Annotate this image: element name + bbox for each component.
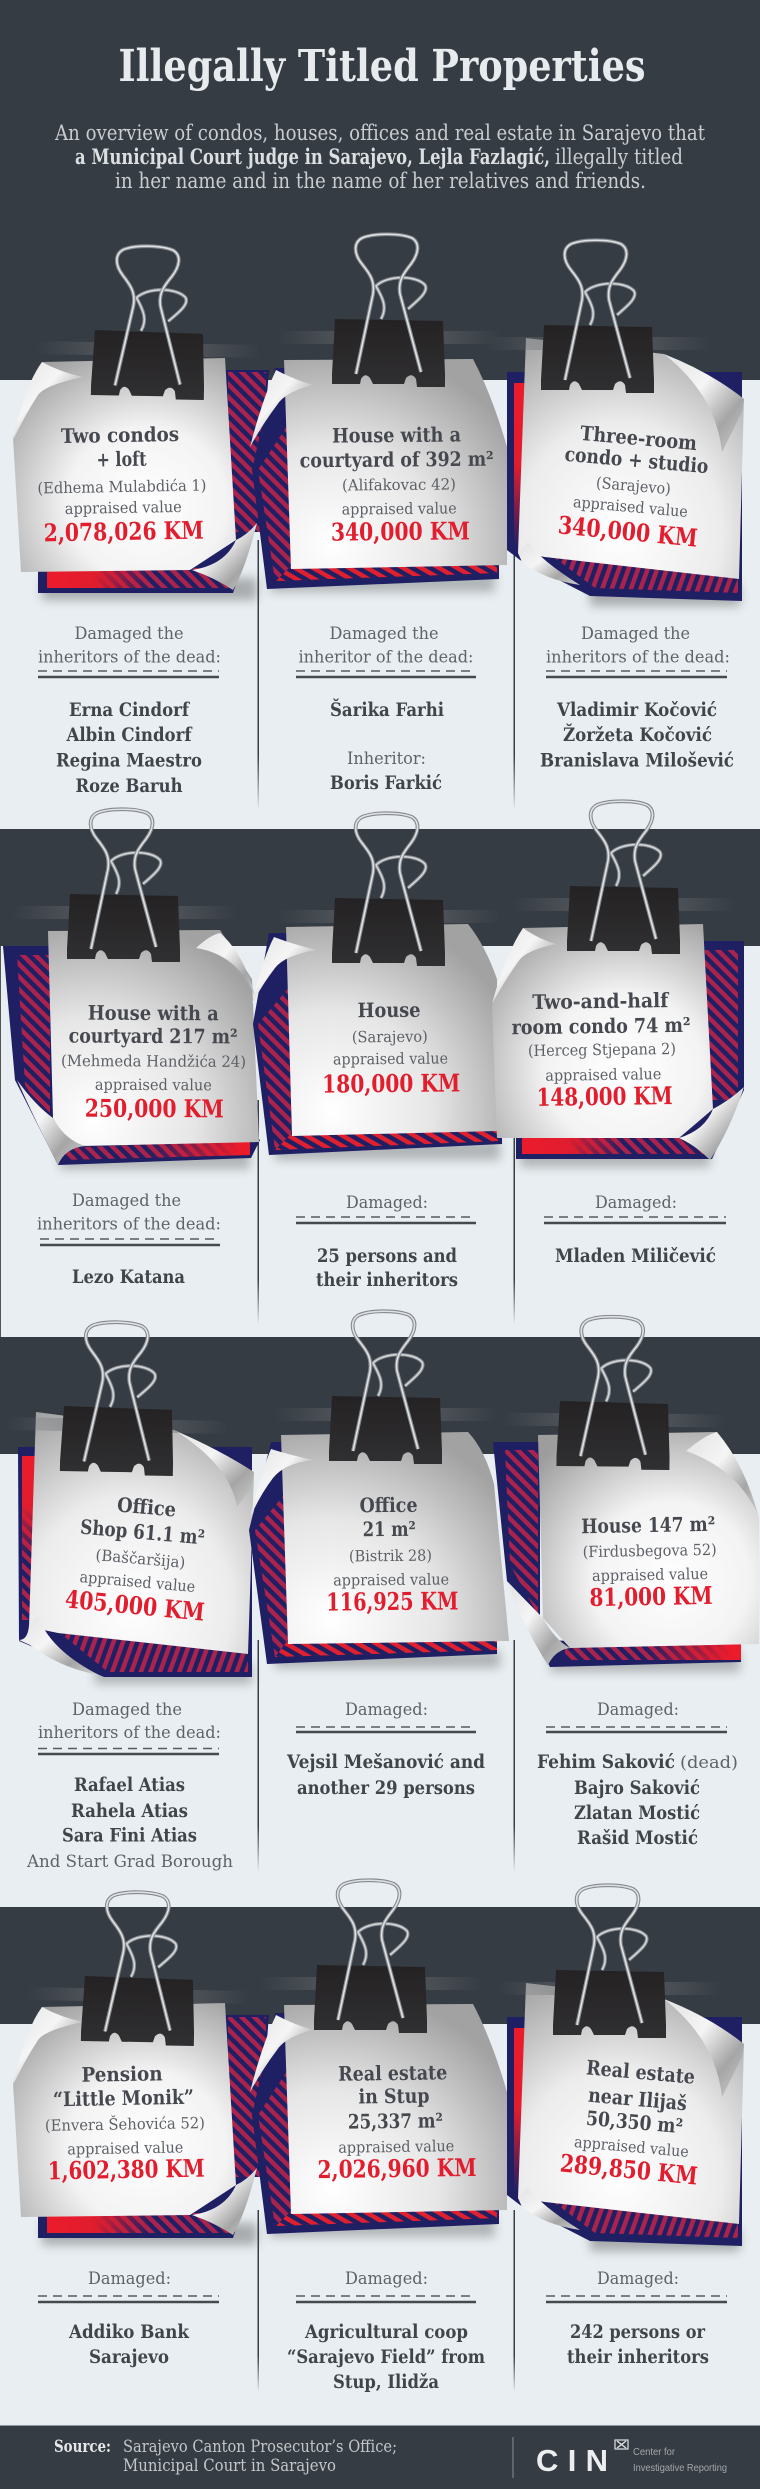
- card text: [325, 1492, 458, 1617]
- damaged column 2 row 2: [296, 1193, 476, 1291]
- binder clip: [277, 234, 501, 387]
- damaged column 1 row 3: [26, 1700, 233, 1872]
- card text: [299, 422, 494, 547]
- card: two-and-half room condo: [492, 801, 744, 1167]
- damaged column 1 row 3: Rahela Atias: [71, 1800, 188, 1822]
- damaged column 2 row 2: their inheritors: [316, 1269, 458, 1291]
- damaged column 3 row 1: Branislava Milošević: [540, 750, 734, 772]
- damaged column 2 row 1: Boris Farkić: [330, 772, 442, 794]
- damaged column 3 row 1: Žoržeta Kočović: [563, 723, 712, 746]
- damaged column 2 row 4: [287, 2269, 485, 2393]
- damaged column 1 row 2: inheritors of the dead:: [37, 1214, 221, 1234]
- damaged column 3 row 4: their inheritors: [567, 2346, 709, 2368]
- card text: appraised value: [545, 1065, 661, 1085]
- card text: 1,602,380 KM: [47, 2154, 205, 2185]
- card text: Three-room: [579, 421, 698, 455]
- damaged column 3 row 3: Bajro Saković: [574, 1777, 700, 1799]
- card text: (Edhema Mulabdića 1): [37, 477, 207, 497]
- row 3 band: [0, 1337, 760, 1454]
- card text: 2,026,960 KM: [317, 2153, 477, 2184]
- damaged column 3 row 1: Vladimir Kočović: [556, 699, 717, 721]
- damaged column 1 row 3: Damaged the: [72, 1700, 182, 1720]
- card text: [316, 2060, 477, 2184]
- damaged column 1 row 2: [37, 1191, 221, 1288]
- damaged column 1 row 1: Erna Cindorf: [69, 699, 191, 721]
- damaged column 2 row 4: Damaged:: [345, 2269, 428, 2289]
- damaged column 2 row 1: [296, 624, 476, 794]
- damaged column 1 row 4: Addiko Bank: [68, 2321, 190, 2343]
- card text: appraised value: [333, 1049, 448, 1068]
- card text: 50,350 m²: [585, 2106, 684, 2138]
- intro text: in her name and in the name of her relatives and friends.: [115, 169, 646, 193]
- damaged column 3 row 3: Rašid Mostić: [577, 1827, 698, 1849]
- card text: appraised value: [95, 1076, 212, 1094]
- damaged column 3 row 1: Damaged the: [581, 624, 690, 644]
- damaged column 2 row 4: Stup, Ilidža: [333, 2371, 439, 2393]
- damaged column 1 row 1: Damaged the: [74, 624, 184, 644]
- damaged column 2 row 2: Damaged:: [346, 1193, 428, 1213]
- card text: appraised value: [573, 2133, 690, 2161]
- card: house firdusbegova: [493, 1316, 759, 1672]
- card text: 2,078,026 KM: [43, 516, 204, 547]
- damaged column 3 row 1: [540, 624, 734, 772]
- card text: 289,850 KM: [559, 2148, 699, 2191]
- card text: (Baščaršija): [95, 1546, 186, 1572]
- damaged column 1 row 3: Sara Fini Atias: [62, 1824, 197, 1846]
- card text: (Bistrik 28): [349, 1547, 432, 1565]
- intro text: [54, 121, 705, 193]
- damaged column 1 row 1: Roze Baruh: [76, 775, 183, 797]
- damaged column 3 row 3: Damaged:: [597, 1700, 679, 1720]
- intro text: a Municipal Court judge in Sarajevo, Lejla Fazlagić,: [75, 144, 550, 169]
- card text: (Herceg Stjepana 2): [528, 1040, 676, 1060]
- card text: Two-and-half: [532, 988, 670, 1014]
- damaged column 2 row 1: Damaged the: [330, 624, 438, 644]
- card text: appraised value: [65, 498, 182, 518]
- card: real estate near ilijas: [498, 1885, 744, 2251]
- card: three-room condo: [486, 240, 744, 606]
- damaged column 2 row 3: [286, 1700, 485, 1799]
- damaged column 3 row 3: Zlatan Mostić: [574, 1802, 700, 1824]
- intro text: illegally titled: [555, 145, 683, 169]
- card text: 25,337 m²: [348, 2108, 443, 2134]
- damaged column 1 row 1: inheritors of the dead:: [38, 648, 221, 668]
- damaged column 1 row 2: Damaged the: [72, 1191, 181, 1211]
- card text: 180,000 KM: [322, 1068, 460, 1099]
- binder clip: [501, 1316, 727, 1470]
- damaged column 1 row 4: Sarajevo: [89, 2346, 169, 2368]
- card text: room condo 74 m²: [511, 1013, 691, 1039]
- title: Illegally Titled Properties: [118, 41, 646, 92]
- binder clip: [259, 1880, 483, 2033]
- damaged column 2 row 3: Damaged:: [345, 1700, 428, 1720]
- card text: near Ilijaš: [587, 2083, 688, 2115]
- damaged column 1 row 3: inheritors of the dead:: [38, 1723, 221, 1743]
- card text: 405,000 KM: [64, 1584, 206, 1627]
- card text: appraised value: [333, 1570, 449, 1590]
- damaged column 2 row 4: Agricultural coop: [304, 2321, 468, 2343]
- damaged column 1 row 1: Albin Cindorf: [66, 724, 193, 746]
- card: office bistrik: [249, 1311, 509, 1668]
- card text: appraised value: [67, 2138, 183, 2159]
- damaged column 3 row 2: [544, 1193, 726, 1267]
- card text: [559, 2055, 699, 2191]
- binder clip: [498, 1885, 722, 2038]
- card: house sarajevo: [252, 813, 502, 1160]
- card text: Real estate: [338, 2060, 447, 2086]
- card text: 250,000 KM: [85, 1094, 224, 1123]
- card: pension little monik: [13, 1890, 269, 2245]
- card text: 21 m²: [363, 1517, 416, 1541]
- card text: 340,000 KM: [331, 516, 470, 547]
- card: house with courtyard 392: [250, 234, 507, 592]
- damaged column 1 row 1: [38, 624, 221, 797]
- damaged column 3 row 1: inheritors of the dead:: [546, 648, 730, 668]
- damaged column 3 row 3: (dead): [680, 1753, 738, 1773]
- damaged column 1 row 4: [38, 2269, 219, 2368]
- damaged column 3 row 4: [546, 2269, 727, 2368]
- damaged column 1 row 2: Lezo Katana: [72, 1266, 185, 1288]
- card text: House 147 m²: [581, 1512, 715, 1538]
- card text: 340,000 KM: [557, 510, 699, 553]
- card text: appraised value: [338, 2137, 454, 2157]
- card text: [44, 2061, 206, 2185]
- card: house with courtyard 217: [3, 809, 260, 1169]
- card text: in Stup: [358, 2084, 430, 2109]
- card text: House with a: [88, 1001, 219, 1025]
- card text: Real estate: [585, 2055, 696, 2089]
- damaged column 2 row 1: Šarika Farhi: [330, 698, 444, 721]
- card text: condo + studio: [564, 442, 709, 478]
- binder clip: [12, 809, 236, 962]
- card text: (Sarajevo): [352, 1028, 428, 1046]
- card text: (Alifakovac 42): [342, 475, 456, 494]
- card text: [581, 1512, 718, 1612]
- card text: appraised value: [592, 1565, 708, 1585]
- card text: courtyard 217 m²: [69, 1024, 238, 1048]
- binder clip: [274, 1311, 498, 1464]
- damaged column 1 row 3: Rafael Atias: [74, 1774, 185, 1796]
- damaged column 1 row 4: Damaged:: [88, 2269, 171, 2289]
- source text: Source:: [54, 2437, 111, 2457]
- header band: [0, 0, 760, 380]
- binder clip: [277, 813, 501, 966]
- row 2 band: [0, 829, 760, 946]
- card text: Two condos: [61, 422, 179, 448]
- card text: [511, 988, 692, 1112]
- card: office shop: [5, 1320, 254, 1684]
- card text: (Envera Šehovića 52): [45, 2114, 205, 2135]
- damaged column 3 row 4: Damaged:: [597, 2269, 679, 2289]
- damaged column 2 row 1: Inheritor:: [347, 749, 426, 769]
- damaged column 3 row 3: [537, 1700, 738, 1849]
- binder clip: [5, 1320, 231, 1477]
- damaged column 1 row 1: Regina Maestro: [56, 750, 202, 772]
- card text: (Mehmeda Handžića 24): [61, 1052, 246, 1071]
- binder clip: [512, 801, 736, 954]
- source text: Municipal Court in Sarajevo: [123, 2456, 336, 2476]
- CIN logo: [536, 2440, 727, 2478]
- card text: House with a: [332, 422, 461, 448]
- card text: appraised value: [572, 493, 689, 521]
- damaged column 2 row 2: 25 persons and: [317, 1245, 457, 1267]
- damaged column 3 row 2: Damaged:: [595, 1193, 677, 1213]
- card text: [61, 1001, 246, 1123]
- card text: Office: [359, 1493, 418, 1517]
- card text: [64, 1493, 206, 1627]
- binder clip: [36, 244, 262, 401]
- card text: 81,000 KM: [589, 1581, 713, 1612]
- card text: Pension: [81, 2061, 163, 2087]
- source text: Sarajevo Canton Prosecutor’s Office;: [123, 2437, 397, 2457]
- card: real estate in stup: [250, 1880, 507, 2237]
- damaged column 2 row 3: another 29 persons: [297, 1777, 475, 1799]
- card text: appraised value: [79, 1568, 196, 1596]
- card text: [36, 422, 207, 547]
- CIN logo: Center for: [633, 2446, 675, 2458]
- binder clip: [26, 1890, 252, 2047]
- card text: House: [357, 998, 421, 1022]
- card text: “Little Monik”: [53, 2085, 194, 2111]
- card text: (Firdusbegova 52): [583, 1541, 717, 1561]
- card text: [557, 421, 709, 553]
- card text: 148,000 KM: [536, 1081, 673, 1112]
- card text: + loft: [96, 447, 147, 471]
- damaged column 2 row 4: “Sarajevo Field” from: [287, 2346, 485, 2368]
- damaged column 3 row 2: Mladen Miličević: [555, 1245, 716, 1267]
- row 4 band: [0, 1907, 760, 2024]
- damaged column 2 row 3: Vejsil Mešanović and: [286, 1751, 485, 1773]
- card text: appraised value: [342, 499, 457, 518]
- card text: (Sarajevo): [595, 474, 672, 498]
- damaged column 3 row 3: Fehim Saković: [537, 1751, 675, 1773]
- source text: [54, 2437, 397, 2476]
- binder clip: [486, 240, 710, 393]
- card text: Shop 61.1 m²: [79, 1515, 206, 1549]
- card text: courtyard of 392 m²: [300, 447, 494, 472]
- card: two condos + loft: [13, 244, 269, 600]
- footer: [0, 2426, 760, 2489]
- damaged column 2 row 1: inheritor of the dead:: [298, 648, 474, 668]
- CIN logo: Investigative Reporting: [633, 2462, 727, 2474]
- card text: 116,925 KM: [326, 1586, 458, 1617]
- card text: [321, 997, 460, 1099]
- CIN logo: CIN: [536, 2443, 608, 2478]
- card text: Office: [116, 1493, 177, 1522]
- damaged column 1 row 3: And Start Grad Borough: [26, 1852, 233, 1872]
- damaged column 3 row 4: 242 persons or: [570, 2321, 706, 2343]
